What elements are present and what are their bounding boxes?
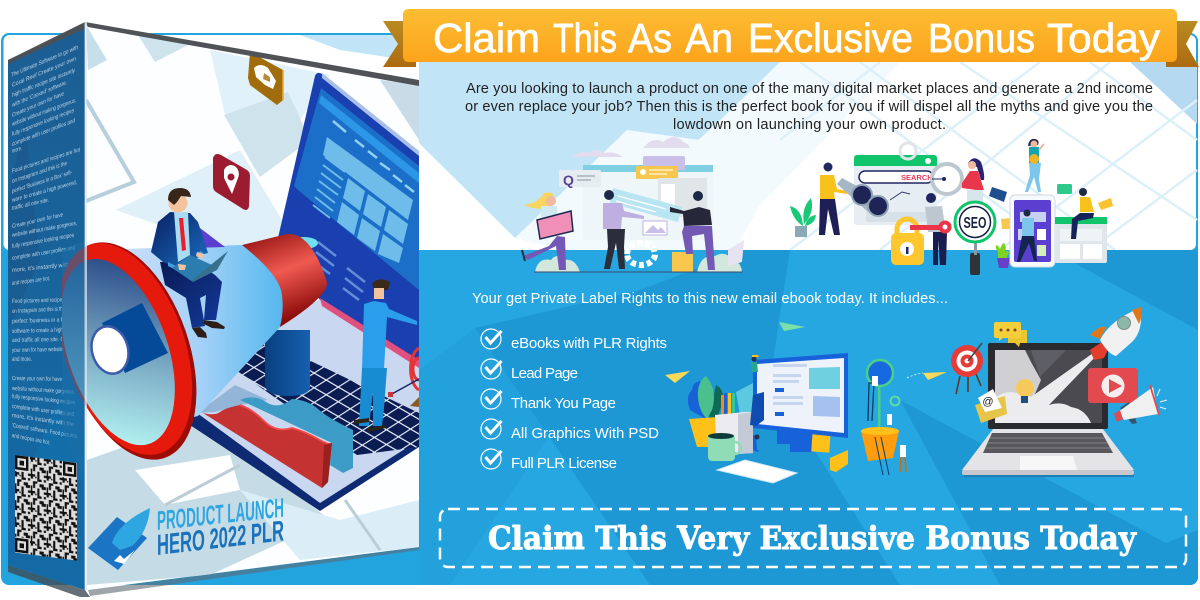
magnifier: SEO: SEO [964,215,986,232]
video player [1088,368,1138,403]
chat bubbles [994,322,1027,347]
side text: ware to create a high powered, [11,179,77,204]
illustration: SEO team [790,139,1113,275]
ribbon title: An [685,15,733,61]
person: blue suit [354,279,417,432]
side text: and more. [12,357,32,363]
item: Lead Page [481,359,578,382]
illustration: team building a web page: Q [563,172,574,188]
box shadow [8,547,419,597]
coffee mug [708,433,741,461]
illustration: website workspace [665,322,947,483]
box side [8,22,86,590]
side text: 'Cooxed' software. Food pictures [12,423,77,440]
potted plant [688,376,723,447]
ribbon title: Exclusive [748,15,913,61]
target [951,343,983,394]
illustration: team building a web page [522,137,744,272]
paper planes [665,322,947,383]
product box [8,22,419,597]
ribbon title: As [628,15,672,61]
side text: Create your own for have [12,212,63,230]
laptop base [187,298,419,511]
side text: with the 'Cooxed' software. [11,79,67,109]
side text: traffic all one site. [12,197,49,212]
ribbon title [433,15,1161,61]
side text: more, it's instantly with the [12,261,79,274]
side text [11,44,80,447]
gear clock [932,164,962,194]
person: man with binoculars [819,162,847,235]
person: man holding card [603,190,644,269]
side text: on Instagram and this is the [12,306,65,315]
item: Lead Page: Lead Page [511,365,578,382]
QR code [15,455,77,561]
illustration: SEO team: SEARCH [901,173,933,182]
intro paragraph [465,81,1153,133]
side text: your own for have website with [12,347,72,354]
intro paragraph: Are you looking to launch a product on one of the many digital market places and generate a 2nd income [466,81,1153,97]
call to action [440,509,1186,567]
rocket [1090,307,1142,360]
person: woman with tablet [522,192,573,270]
padlock [891,219,924,265]
red app icon [213,154,250,210]
item: All Graphics With PSD: All Graphics With PSD [511,425,659,442]
side text: Food pictures and recipes are hot [12,297,80,305]
box front: PRODUCT LAUNCH [157,492,284,536]
flower tower with ladder [861,360,906,475]
person: businessman with laptop [151,188,228,338]
person: woman with red top [962,158,984,202]
desk organiser [715,383,753,454]
subheading: Your get Private Label Rights to this new email ebook today. It includes... [472,291,948,307]
item: Thank You Page: Thank You Page [511,395,616,412]
box front [32,22,419,590]
orange app icon [248,52,283,105]
envelope: @ [982,396,994,408]
intro paragraph: or even replace your job? Then this is the perfect book for you if will dispel all the myths and give you the [465,99,1153,115]
ribbon title: Bonus [928,15,1035,61]
monitor [750,353,848,472]
logo text: HERO 2022 PLR [157,515,284,562]
person: man on stand [670,191,715,270]
light bulb [1016,379,1034,403]
item: Full PLR License: Full PLR License [511,455,617,472]
item: Thank You Page [481,389,616,412]
side text: more. [12,145,22,155]
side text: The Ultimate Software to go with [11,44,78,79]
plant [790,198,816,237]
smartphone with man [1010,195,1055,267]
item: eBooks with PLR Rights: eBooks with PLR Rights [511,335,667,352]
logo mark [88,508,150,570]
side text: Food pictures and recipes are hot [12,146,80,175]
ribbon title: Claim [433,15,540,61]
side text: website without make gorgeous, [11,221,77,239]
side text: Create your own for have [12,376,62,383]
keyboard [717,460,797,483]
side text: and traffic all one site. Create [12,337,76,344]
side text: fully responsive looking recipes [12,233,74,250]
side text: and recipes are hot. [12,433,50,447]
side text: on Instagram and this is the [12,160,67,185]
target and arrow [388,348,419,407]
side text: and recipes are hot. [12,276,50,287]
envelope [975,389,1007,423]
chat bubbles and envelopes [989,184,1113,268]
side text: Coral Reef Create your own [12,55,76,89]
side text: high traffic recipe site instantly [12,67,76,99]
side text: Create your own for have [12,90,64,119]
side text: software to create a high power [12,327,77,335]
binoculars [837,178,888,216]
side text: complete with user profiles and [12,245,75,262]
item: Full PLR License [481,449,617,472]
checklist [481,329,667,472]
illustration: laptop with rocket [951,307,1167,477]
tiny workers [751,355,760,452]
intro paragraph: lowdown on launching your own product. [673,117,946,133]
logo text [158,498,284,555]
magnifier: SEO [955,202,995,275]
call to action: Claim This Very Exclusive Bonus Today [488,519,1137,557]
side text: complete with user profiles and [12,117,75,148]
person: man with key [910,193,952,265]
item: eBooks with PLR Rights [481,329,667,352]
megaphone [1114,385,1167,424]
box edge highlight [85,22,419,86]
side text: website without make gorgeous, [11,386,75,396]
monitor [278,73,419,362]
ribbon title: This [553,15,617,61]
ribbon title: Today [1047,15,1161,61]
side text: perfect 'Business in a Box' soft- [12,169,72,195]
ribbon banner [383,9,1199,67]
side text: website without making gorgeous, [11,97,76,128]
side text: more, it's instantly with the [12,413,75,428]
browser with seated man [1055,188,1107,263]
side text: fully responsive looking recipes [12,107,74,138]
side text: fully responsive looking recipes [12,394,75,406]
chart waves [203,397,353,488]
person: woman with bag [1025,139,1044,192]
side text: complete with user profiles and [12,404,74,418]
item: All Graphics With PSD [481,419,659,442]
side text: perfect 'business in a box' [12,317,70,325]
megaphone [62,234,328,460]
